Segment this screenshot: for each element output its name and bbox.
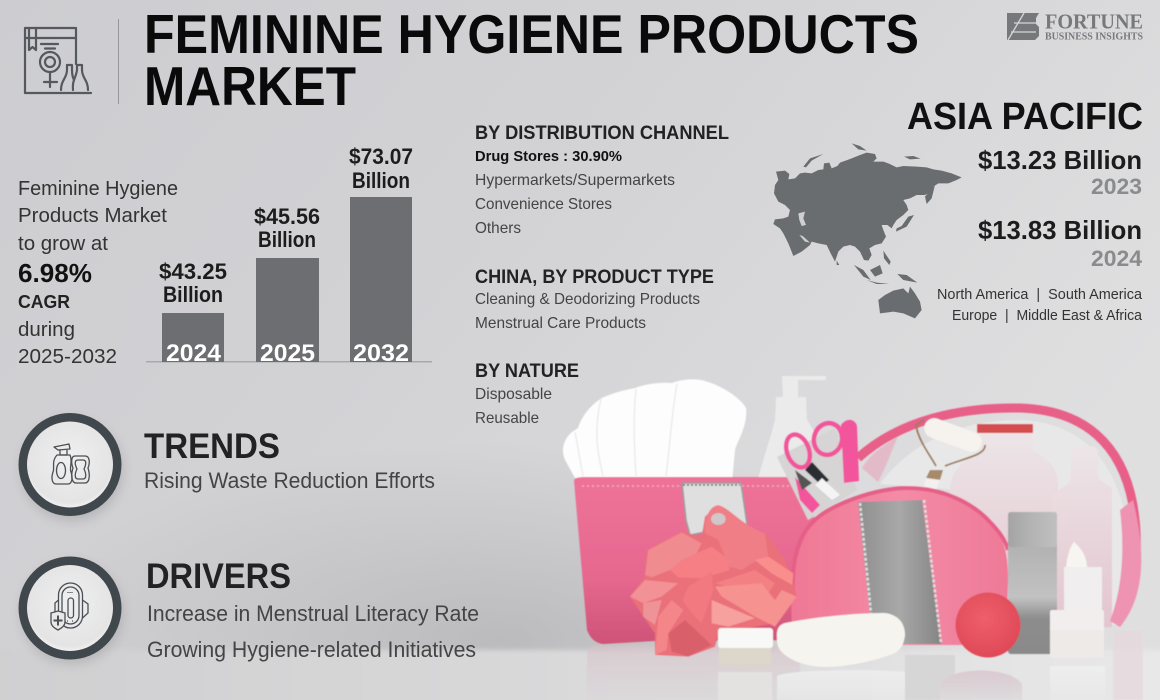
heading and text: trends: Rising Waste Reduction Efforts <box>144 468 435 493</box>
bar chart: market size: 2025 <box>260 340 315 367</box>
text block: CAGR summary: to grow at <box>18 233 108 255</box>
region stats: Asia Pacific: Europe | Middle East & Africa <box>952 307 1143 324</box>
segments: by nature: BY NATURE <box>475 361 579 382</box>
nail kit and scissors <box>777 420 859 520</box>
segments: by nature: Reusable <box>475 410 539 427</box>
pink bag back <box>574 477 815 644</box>
text block: CAGR summary: Feminine Hygiene <box>18 178 178 200</box>
logo: Fortune Business Insights <box>1007 10 1143 42</box>
segments: distribution channel: BY DISTRIBUTION CHANNEL <box>475 123 729 144</box>
region stats: Asia Pacific: North America | South America <box>937 286 1143 303</box>
segments: distribution channel: Others <box>475 220 521 237</box>
text block: CAGR summary: during <box>18 319 75 341</box>
icon: trends badge <box>18 413 122 520</box>
bar chart: market size: Billion <box>352 168 410 193</box>
bar chart: market size: 2024 <box>166 340 222 367</box>
bath bomb <box>956 592 1020 658</box>
icon: drivers badge <box>18 556 122 663</box>
region stats: Asia Pacific: 2024 <box>1091 246 1143 271</box>
bar chart: market size: Billion <box>163 282 223 307</box>
text block: CAGR summary: 2025-2032 <box>18 346 117 368</box>
segments: by nature: Disposable <box>475 386 552 403</box>
segments: China by product type: Cleaning & Deodorizing Products <box>475 291 700 308</box>
bar chart: market size: $73.07 <box>349 144 413 169</box>
region stats: Asia Pacific <box>907 96 1143 324</box>
logo: Fortune Business Insights: BUSINESS INSIGHTS <box>1045 32 1143 42</box>
segments: China by product type: Menstrual Care Products <box>475 315 646 332</box>
heading and text: drivers: DRIVERS <box>146 557 291 596</box>
map: Asia Pacific <box>773 143 962 318</box>
jade roller <box>916 415 985 490</box>
cream jar <box>718 628 773 668</box>
text block: CAGR summary: Products Market <box>18 205 167 227</box>
text block: CAGR summary: 6.98% <box>18 258 92 288</box>
heading and text: drivers <box>146 557 479 662</box>
region stats: Asia Pacific: $13.83 Billion <box>978 215 1142 245</box>
segments: China by product type <box>475 267 714 332</box>
segments: distribution channel <box>475 123 729 237</box>
lip balm <box>1050 542 1104 658</box>
heading and text: drivers: Growing Hygiene-related Initiatives <box>147 637 476 662</box>
bar chart: market size <box>146 144 432 367</box>
region stats: Asia Pacific: $13.23 Billion <box>978 145 1142 175</box>
heading and text: trends: TRENDS <box>144 427 280 466</box>
soap bar <box>777 613 905 667</box>
logo: Fortune Business Insights: FORTUNE <box>1045 10 1143 34</box>
title: FEMININE HYGIENE PRODUCTS <box>144 3 919 65</box>
floor reflections <box>587 630 1143 700</box>
loofah <box>630 505 797 657</box>
bar chart: market size: Billion <box>258 227 316 252</box>
heading and text: trends <box>144 427 435 493</box>
segments: distribution channel: Hypermarkets/Supermarkets <box>475 172 675 189</box>
title: MARKET <box>144 55 356 117</box>
silver cylinder <box>1008 512 1057 654</box>
region stats: Asia Pacific: 2023 <box>1091 174 1142 199</box>
region stats: Asia Pacific: ASIA PACIFIC <box>907 96 1143 138</box>
icon: book with female symbol and menstrual cups <box>25 28 91 93</box>
front pink pouch <box>791 488 1008 645</box>
heading and text: drivers: Increase in Menstrual Literacy Rate <box>147 601 479 626</box>
bar chart: market size: $43.25 <box>159 259 227 284</box>
sanitary pads <box>563 379 746 482</box>
pump bottle <box>755 376 826 490</box>
segments: by nature <box>475 361 579 427</box>
bar chart: market size: $45.56 <box>254 204 320 229</box>
title <box>144 3 919 117</box>
clear pouch with bottles <box>858 408 1141 627</box>
text block: CAGR summary: CAGR <box>18 292 70 312</box>
segments: China by product type: CHINA, BY PRODUCT TYPE <box>475 267 714 288</box>
segments: distribution channel: Drug Stores : 30.90% <box>475 148 622 165</box>
text block: CAGR summary <box>18 178 178 368</box>
segments: distribution channel: Convenience Stores <box>475 196 612 213</box>
bar chart: market size: 2032 <box>353 340 409 367</box>
photo: pink cosmetic bags and toiletries <box>563 376 1143 700</box>
